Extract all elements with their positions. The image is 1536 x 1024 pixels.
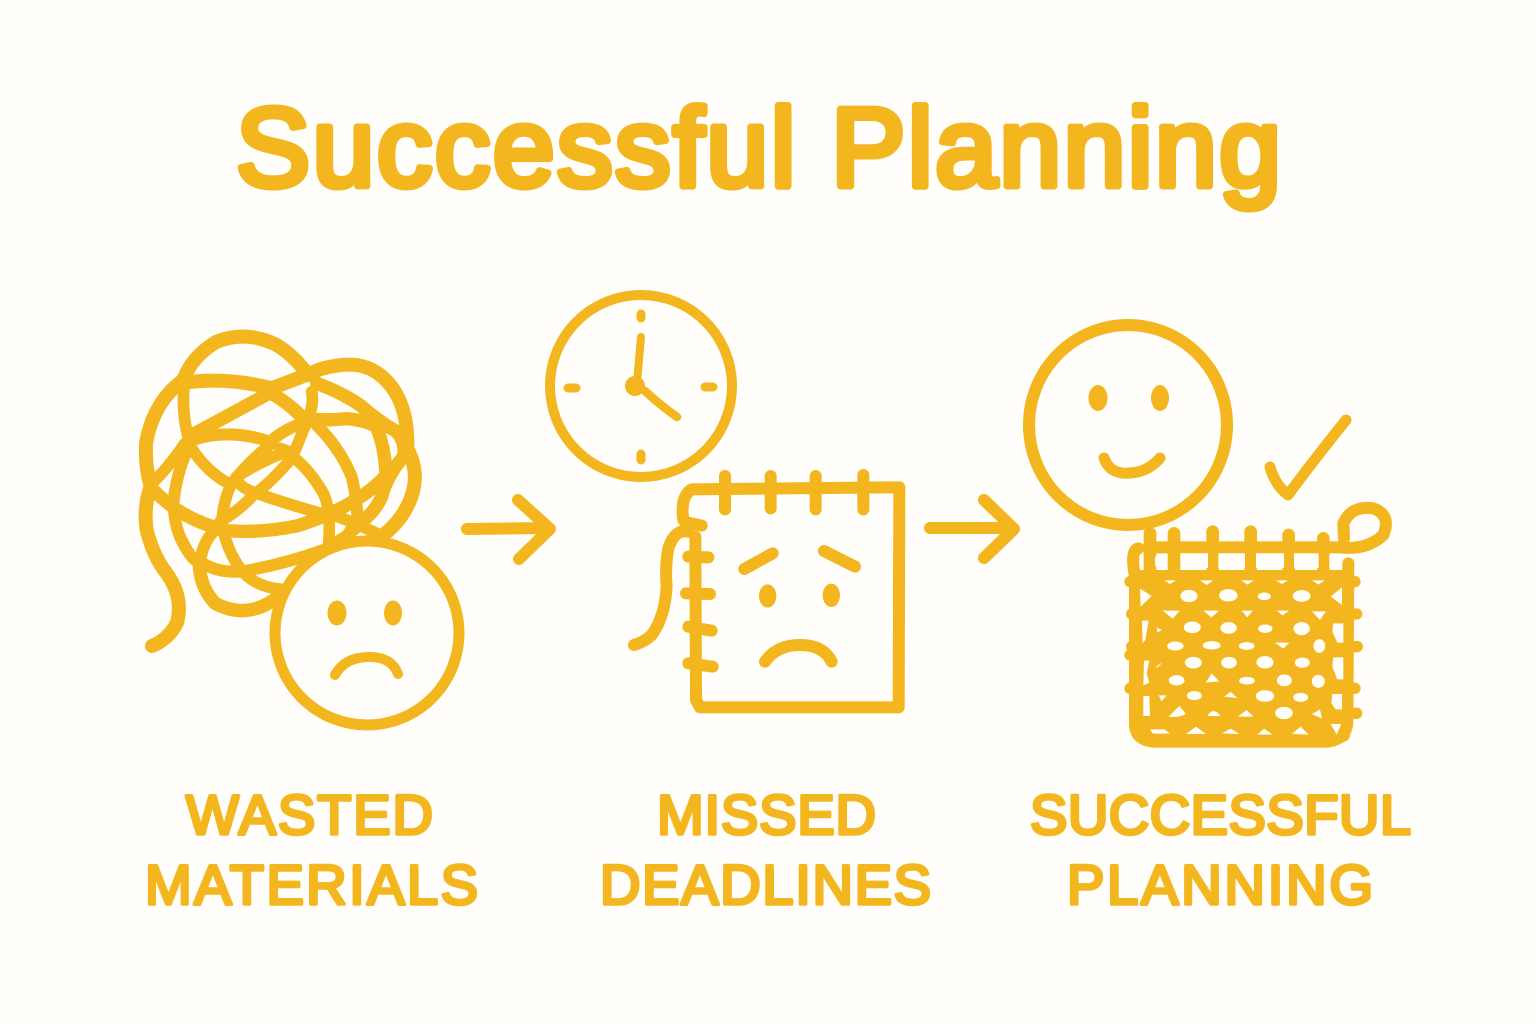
icon: knitted square (1130, 508, 1386, 742)
label: wasted materials (145, 783, 478, 916)
label: wasted materials: WASTED (186, 783, 433, 846)
panel: successful planning (1029, 325, 1386, 742)
label: missed deadlines: MISSED (657, 783, 876, 846)
panel: wasted materials (146, 337, 550, 725)
title: Successful Planning (236, 86, 1281, 210)
icon: happy face (1029, 325, 1227, 525)
icon: sad face (275, 541, 459, 725)
arrow (467, 500, 550, 559)
icon: sad calendar (634, 475, 899, 707)
label: successful planning (1030, 783, 1411, 916)
label: missed deadlines: DEADLINES (600, 853, 931, 916)
label: missed deadlines (600, 783, 931, 916)
icon: tangled yarn ball (146, 337, 415, 646)
panel: missed deadlines (550, 295, 1014, 707)
icon: check mark (1270, 420, 1346, 495)
icon: clock (550, 295, 732, 477)
label: wasted materials: MATERIALS (145, 853, 478, 916)
label: successful planning: SUCCESSFUL (1030, 783, 1411, 846)
arrow (930, 500, 1014, 558)
label: successful planning: PLANNING (1067, 853, 1373, 916)
knit holes (1140, 553, 1343, 735)
